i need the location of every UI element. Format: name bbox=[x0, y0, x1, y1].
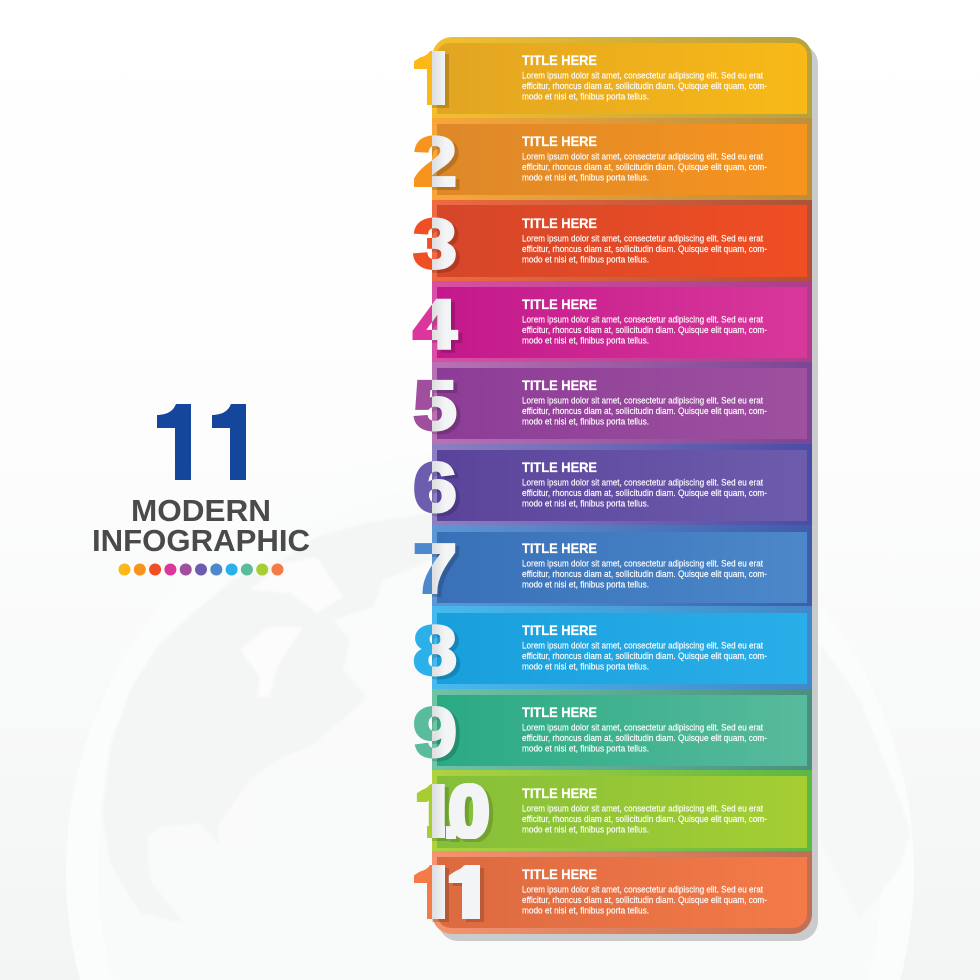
row 3 bbox=[413, 200, 812, 282]
row 9 band bbox=[432, 689, 812, 771]
heading: MODERN INFOGRAPHIC bbox=[92, 493, 310, 558]
row 2 text: modo et nisi et, finibus porta tellus. bbox=[522, 173, 649, 183]
row 6 number: 6 bbox=[413, 448, 457, 526]
row 7 text bbox=[522, 540, 767, 590]
row 4 text: Lorem ipsum dolor sit amet, consectetur adipiscing elit. Sed eu erat bbox=[522, 315, 763, 325]
row 6 text: efficitur, rhoncus diam at, sollicitudin diam. Quisque elit quam, com- bbox=[522, 488, 767, 498]
row 2 text: TITLE HERE bbox=[522, 133, 597, 149]
row 2 text: Lorem ipsum dolor sit amet, consectetur adipiscing elit. Sed eu erat bbox=[522, 152, 763, 162]
row 10 bbox=[415, 770, 812, 852]
row 8 band bbox=[432, 606, 812, 689]
row 2 text bbox=[522, 133, 767, 183]
row 11 text: efficitur, rhoncus diam at, sollicitudin diam. Quisque elit quam, com- bbox=[522, 895, 767, 905]
row 10 text: TITLE HERE bbox=[522, 785, 597, 801]
row 11 text: TITLE HERE bbox=[522, 866, 597, 882]
row 1 band bbox=[432, 37, 812, 119]
row 4 bbox=[413, 281, 812, 364]
row 8 bbox=[413, 606, 812, 690]
row 2 number: 2 bbox=[413, 122, 457, 200]
row 4 text bbox=[522, 296, 767, 346]
row 1 bbox=[415, 37, 812, 120]
row 5 number: 5 bbox=[413, 366, 457, 444]
row 9 text bbox=[522, 704, 767, 754]
heading: MODERN INFOGRAPHIC: MODERN bbox=[131, 493, 271, 528]
row 8 text: Lorem ipsum dolor sit amet, consectetur adipiscing elit. Sed eu erat bbox=[522, 641, 763, 651]
row 1 text: TITLE HERE bbox=[522, 52, 597, 68]
row 7 text: efficitur, rhoncus diam at, sollicitudin diam. Quisque elit quam, com- bbox=[522, 569, 767, 579]
row 5 bbox=[413, 362, 812, 444]
large number 11: 11 bbox=[150, 381, 266, 504]
row 9 number: 9 bbox=[413, 694, 457, 772]
row 5 text: Lorem ipsum dolor sit amet, consectetur adipiscing elit. Sed eu erat bbox=[522, 396, 763, 406]
row 3 text: modo et nisi et, finibus porta tellus. bbox=[522, 255, 649, 265]
row 10 text: Lorem ipsum dolor sit amet, consectetur adipiscing elit. Sed eu erat bbox=[522, 804, 763, 814]
row 4 number: 4 bbox=[413, 286, 457, 364]
row 5 text bbox=[522, 377, 767, 427]
colour dots bbox=[118, 564, 284, 576]
row 1 number: 1 bbox=[415, 42, 454, 120]
row 7 bbox=[413, 525, 812, 608]
row 5 text: TITLE HERE bbox=[522, 377, 597, 393]
row 6 text: Lorem ipsum dolor sit amet, consectetur adipiscing elit. Sed eu erat bbox=[522, 478, 763, 488]
row 9 text: TITLE HERE bbox=[522, 704, 597, 720]
row 2 bbox=[413, 118, 812, 200]
row 7 band bbox=[432, 525, 812, 607]
row 5 band bbox=[432, 362, 812, 444]
row 4 text: TITLE HERE bbox=[522, 296, 597, 312]
row 1 text: efficitur, rhoncus diam at, sollicitudin diam. Quisque elit quam, com- bbox=[522, 81, 767, 91]
row 7 text: TITLE HERE bbox=[522, 540, 597, 556]
row 8 text: modo et nisi et, finibus porta tellus. bbox=[522, 662, 649, 672]
row 9 text: modo et nisi et, finibus porta tellus. bbox=[522, 744, 649, 754]
row 11 text bbox=[522, 866, 767, 916]
row 10 text bbox=[522, 785, 767, 835]
row 4 text: modo et nisi et, finibus porta tellus. bbox=[522, 336, 649, 346]
row 4 text: efficitur, rhoncus diam at, sollicitudin diam. Quisque elit quam, com- bbox=[522, 325, 767, 335]
row 9 text: Lorem ipsum dolor sit amet, consectetur adipiscing elit. Sed eu erat bbox=[522, 723, 763, 733]
row 2 band bbox=[432, 118, 812, 200]
row 6 bbox=[413, 444, 812, 526]
row 1 text: modo et nisi et, finibus porta tellus. bbox=[522, 92, 649, 102]
row 5 text: modo et nisi et, finibus porta tellus. bbox=[522, 417, 649, 427]
row 9 text: efficitur, rhoncus diam at, sollicitudin diam. Quisque elit quam, com- bbox=[522, 733, 767, 743]
row 10 band bbox=[432, 770, 812, 852]
row 10 number: 10 bbox=[415, 772, 489, 852]
row 3 text: TITLE HERE bbox=[522, 215, 597, 231]
row 11 band bbox=[432, 851, 812, 934]
Hudson Bay bbox=[240, 627, 303, 697]
row 10 text: efficitur, rhoncus diam at, sollicitudin diam. Quisque elit quam, com- bbox=[522, 814, 767, 824]
row 3 text bbox=[522, 215, 767, 265]
row 6 text: modo et nisi et, finibus porta tellus. bbox=[522, 499, 649, 509]
continent: right side landmass bbox=[820, 643, 910, 920]
row 2 text: efficitur, rhoncus diam at, sollicitudin diam. Quisque elit quam, com- bbox=[522, 162, 767, 172]
row 8 text: efficitur, rhoncus diam at, sollicitudin diam. Quisque elit quam, com- bbox=[522, 651, 767, 661]
row 10 text: modo et nisi et, finibus porta tellus. bbox=[522, 825, 649, 835]
row 11 number: 11 bbox=[415, 856, 489, 934]
row 8 text: TITLE HERE bbox=[522, 622, 597, 638]
row 4 band bbox=[432, 281, 812, 363]
row 11 bbox=[415, 851, 812, 934]
heading: MODERN INFOGRAPHIC: INFOGRAPHIC bbox=[92, 523, 310, 558]
row 3 text: Lorem ipsum dolor sit amet, consectetur adipiscing elit. Sed eu erat bbox=[522, 234, 763, 244]
row 7 text: modo et nisi et, finibus porta tellus. bbox=[522, 580, 649, 590]
row 7 number: 7 bbox=[413, 530, 457, 608]
row 7 text: Lorem ipsum dolor sit amet, consectetur adipiscing elit. Sed eu erat bbox=[522, 559, 763, 569]
row 3 number: 3 bbox=[413, 204, 457, 282]
continent: North America bbox=[102, 513, 433, 923]
row 3 text: efficitur, rhoncus diam at, sollicitudin diam. Quisque elit quam, com- bbox=[522, 244, 767, 254]
row 6 band bbox=[432, 444, 812, 526]
row 8 number: 8 bbox=[413, 612, 457, 690]
row 11 text: modo et nisi et, finibus porta tellus. bbox=[522, 906, 649, 916]
row 3 band bbox=[432, 200, 812, 282]
row 5 text: efficitur, rhoncus diam at, sollicitudin diam. Quisque elit quam, com- bbox=[522, 406, 767, 416]
row 1 text: Lorem ipsum dolor sit amet, consectetur adipiscing elit. Sed eu erat bbox=[522, 71, 763, 81]
row 6 text bbox=[522, 459, 767, 509]
row 11 text: Lorem ipsum dolor sit amet, consectetur adipiscing elit. Sed eu erat bbox=[522, 885, 763, 895]
panel shadow bbox=[438, 44, 818, 941]
row 1 text bbox=[522, 52, 767, 102]
globe backdrop bbox=[66, 448, 914, 980]
Arctic islands bbox=[250, 557, 343, 613]
row 9 bbox=[413, 689, 812, 772]
row 6 text: TITLE HERE bbox=[522, 459, 597, 475]
row 8 text bbox=[522, 622, 767, 672]
